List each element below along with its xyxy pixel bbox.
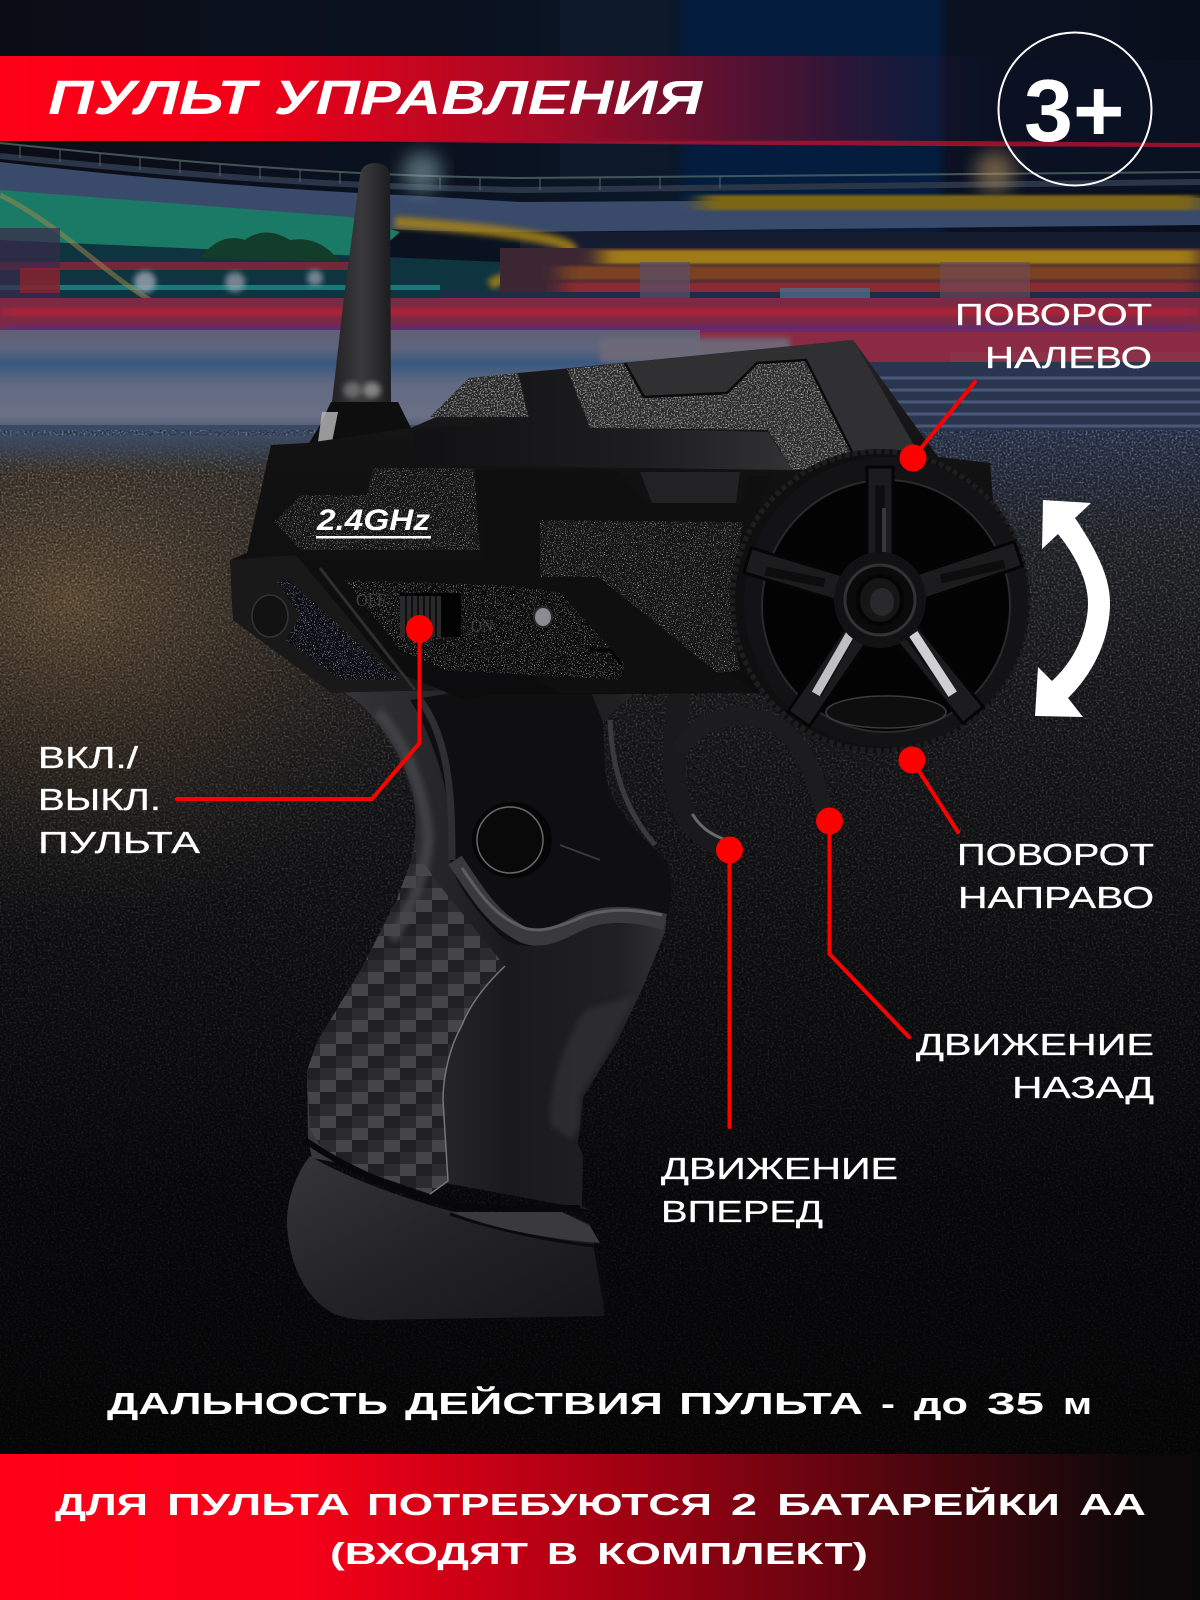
asphalt ground [0, 430, 1200, 1454]
age badge 3+ [998, 32, 1152, 186]
power switch: ON [471, 616, 493, 636]
title [48, 72, 703, 125]
red horizontal flare [300, 135, 1200, 147]
title: ПУЛЬТ [48, 72, 261, 125]
title: УПРАВЛЕНИЯ [274, 72, 703, 125]
callout: move backward [816, 808, 1154, 1105]
age badge 3+: 3+ [1024, 61, 1124, 160]
battery note: АА [1079, 1487, 1146, 1522]
controller body [230, 340, 993, 700]
inset thumb rest [550, 995, 635, 1140]
antenna [308, 163, 411, 445]
battery note [55, 1486, 1146, 1571]
range text: ДАЛЬНОСТЬ [107, 1386, 388, 1421]
battery note: В [547, 1536, 578, 1571]
callout: power on/off: ВКЛ./ [38, 740, 138, 775]
remote control product illustration [230, 163, 1030, 1320]
battery note: ДЛЯ [55, 1487, 148, 1522]
rotation arrow [1035, 500, 1110, 717]
battery note: (ВХОДЯТ [330, 1536, 528, 1571]
callout: turn left: НАЛЕВО [985, 340, 1152, 375]
callout: move forward: ВПЕРЕД [661, 1194, 823, 1229]
side round button [252, 595, 288, 637]
yellow light trails and right side bands [395, 195, 1200, 318]
range text: ПУЛЬТА [679, 1386, 863, 1421]
LED [534, 607, 552, 627]
misty road surface [0, 330, 1200, 462]
top panels [430, 373, 529, 417]
wheel spokes [760, 480, 1006, 708]
power switch: OFF [356, 590, 386, 610]
grip [287, 690, 672, 1320]
battery note: БАТАРЕЙКИ [777, 1486, 1060, 1522]
carbon fibre insert [307, 850, 505, 1194]
battery note: ПУЛЬТА [167, 1487, 350, 1522]
callout: power on/off [38, 615, 433, 860]
callout: move forward: ДВИЖЕНИЕ [661, 1151, 898, 1186]
upper grip frame [410, 690, 672, 946]
bottom banner [0, 1454, 1200, 1600]
range text: м [1063, 1386, 1092, 1421]
callout: move forward [661, 836, 898, 1229]
left diagonal panels [230, 555, 441, 693]
range text: 35 [987, 1386, 1044, 1421]
trigger [674, 695, 822, 848]
battery note: ПОТРЕБУЮТСЯ [367, 1487, 712, 1522]
top banner [0, 56, 1000, 141]
range text: до [914, 1386, 968, 1421]
2.4GHz panel [274, 468, 480, 550]
callout: power on/off: ПУЛЬТА [38, 825, 200, 860]
base pad [287, 1156, 604, 1320]
green mural band [0, 190, 500, 302]
callout: turn right [898, 746, 1154, 915]
callout: power on/off: ВЫКЛ. [38, 782, 161, 817]
lower red motion streaks [0, 298, 1200, 364]
callout: turn right: ПОВОРОТ [957, 837, 1154, 872]
range text [107, 1385, 1092, 1421]
2.4GHz panel: 2.4GHz [316, 504, 430, 537]
callout: turn right: НАПРАВО [958, 880, 1154, 915]
battery note: 2 [731, 1487, 757, 1522]
callout: turn left [900, 297, 1152, 472]
grip round button [472, 802, 552, 878]
callout: move backward: НАЗАД [1012, 1070, 1154, 1105]
battery note: КОМПЛЕКТ) [597, 1536, 868, 1571]
range text: - [881, 1386, 895, 1421]
callout: move backward: ДВИЖЕНИЕ [916, 1027, 1154, 1062]
main textured panel [540, 520, 743, 673]
overpass deck and railing [0, 143, 1200, 248]
front recess panel [476, 470, 770, 693]
power switch [356, 590, 493, 637]
callout: turn left: ПОВОРОТ [955, 297, 1152, 332]
range text: ДЕЙСТВИЯ [405, 1385, 663, 1421]
thumb wheel [730, 449, 1030, 753]
